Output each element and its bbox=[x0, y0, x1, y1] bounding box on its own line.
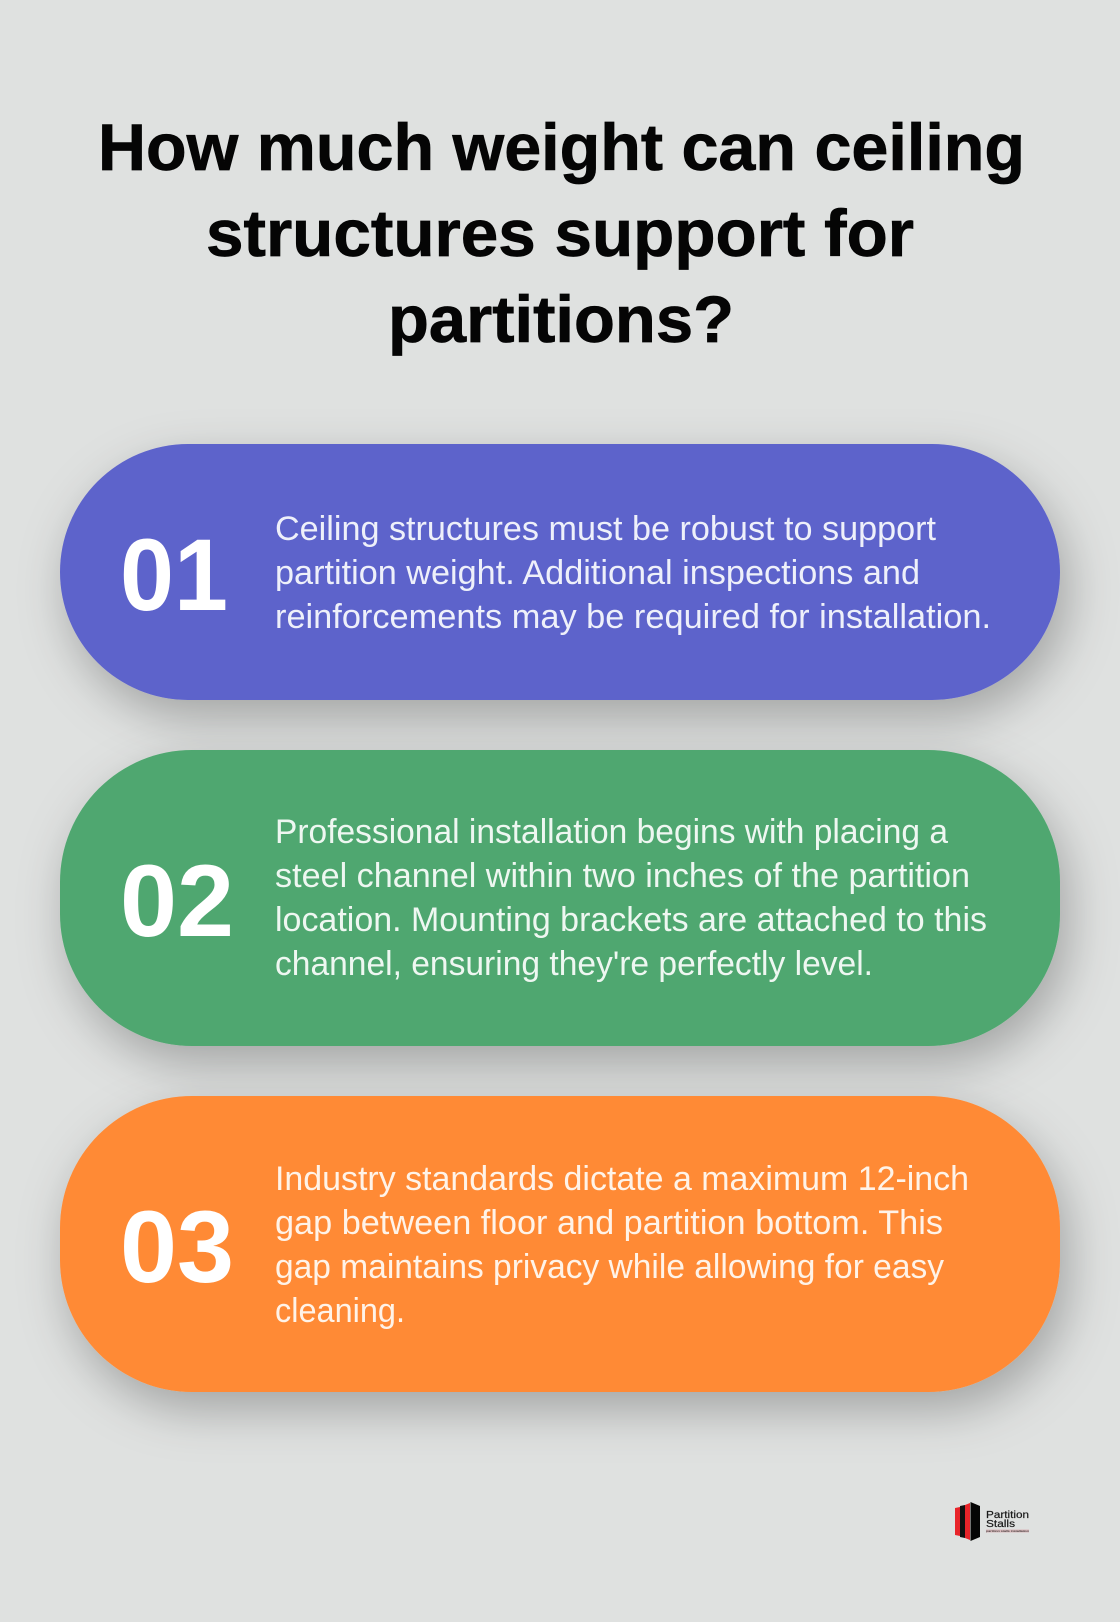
text block 03: cleaning. bbox=[275, 1292, 405, 1330]
text block 02: channel, ensuring they're perfectly level. bbox=[275, 945, 873, 983]
text block 03: gap maintains privacy while allowing for easy bbox=[275, 1248, 944, 1286]
number 01: 01 bbox=[120, 518, 228, 632]
number 03: 03 bbox=[120, 1190, 234, 1304]
number 02: 02 bbox=[120, 844, 234, 958]
logo tagline: partition stalls installation bbox=[986, 1529, 1029, 1533]
pill background 02 bbox=[60, 750, 1060, 1046]
text block 02: steel channel within two inches of the partition bbox=[275, 857, 970, 895]
title bbox=[98, 110, 1025, 356]
logo wordmark: Partition bbox=[986, 1510, 1029, 1521]
text block 02: Professional installation begins with placing a bbox=[275, 813, 948, 851]
text block 01: reinforcements may be required for installation. bbox=[275, 598, 991, 636]
title: How much weight can ceiling bbox=[98, 110, 1025, 184]
text block 02: location. Mounting brackets are attached to this bbox=[275, 901, 987, 939]
title: structures support for bbox=[206, 196, 914, 270]
text block 03 bbox=[275, 1160, 969, 1330]
panel: step 01 bbox=[60, 444, 1060, 700]
logo wordmark: Stalls bbox=[986, 1519, 1015, 1530]
text block 01 bbox=[275, 510, 991, 636]
logo: Partition Stalls bbox=[955, 1502, 1029, 1541]
panel: step 03 bbox=[60, 1096, 1060, 1392]
text block 02 bbox=[275, 813, 987, 983]
panel: step 02 bbox=[60, 750, 1060, 1046]
icon: partition bars bbox=[955, 1502, 980, 1541]
pill background 01 bbox=[60, 444, 1060, 700]
text block 03: gap between floor and partition bottom. This bbox=[275, 1204, 943, 1242]
text block 03: Industry standards dictate a maximum 12-inch bbox=[275, 1160, 969, 1198]
logo wordmark bbox=[986, 1510, 1029, 1530]
text block 01: Ceiling structures must be robust to support bbox=[275, 510, 937, 548]
title: partitions? bbox=[388, 282, 734, 356]
pill background 03 bbox=[60, 1096, 1060, 1392]
text block 01: partition weight. Additional inspections and bbox=[275, 554, 920, 592]
